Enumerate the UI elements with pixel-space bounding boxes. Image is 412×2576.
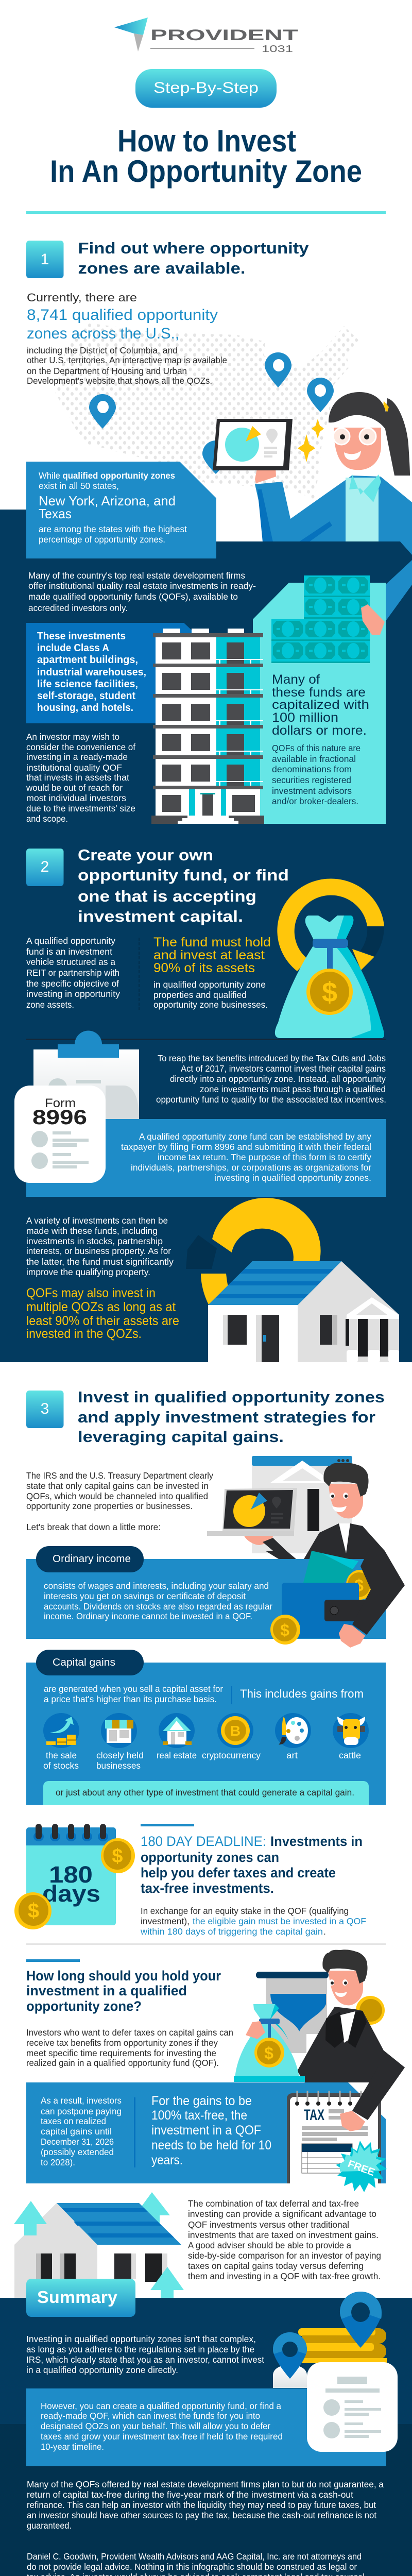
text: cash-out refinance: return of capital tax-free during the five-year mark of the investment via a cash-out [27, 2489, 353, 2500]
text: how long to hold: Investors who want to defer taxes on capital gains can [26, 2027, 233, 2038]
text: multiple QOZs: invested in the QOZs. [26, 1327, 142, 1341]
summary badge [26, 2279, 135, 2317]
text: convenience of QOF: and scope. [26, 814, 68, 824]
panel: tax free gains: As a result, investors [41, 2095, 122, 2106]
text: tax cuts and jobs act: directly into an opportunity zone. Instead, all opportunity [170, 1074, 386, 1084]
text: 90 percent rule: in qualified opportunity zone [153, 979, 266, 990]
icon: sparkles [298, 419, 324, 462]
panel: tax free gains [26, 2082, 386, 2183]
panel: tax free gains: capital gains until [41, 2126, 112, 2137]
text: what is a QOF: REIT or partnership with [26, 968, 119, 978]
step 2 heading: Create your own [78, 846, 213, 864]
panel: form 8996 description: taxpayer by filing Form 8996 and submitting it with their federal [121, 1142, 371, 1152]
panel: 100 million funds: and/or broker-dealers. [272, 796, 358, 806]
text: real estate firms: offer institutional quality real estate investments in ready- [28, 581, 256, 591]
text: convenience of QOF: investing in a ready-made [26, 752, 128, 762]
text: cash-out refinance: Many of the QOFs offered by real estate development firms plan to but do not guarantee, a [27, 2479, 384, 2489]
text: what is a QOF: zone assets. [26, 999, 74, 1010]
text: summary intro: as long as you adhere to the regulations set in place by the [26, 2344, 254, 2354]
text: variety of investments: the latter, the fund must significantly [26, 1257, 174, 1267]
text: 90 percent rule: 90% of its assets [153, 961, 255, 975]
text: combination of tax deferral: investing can provide a significant advantage to [188, 2209, 376, 2219]
panel: 100 million funds: Many of [272, 672, 320, 687]
panel: 100 million funds [253, 583, 386, 824]
text: what is a QOF [26, 936, 120, 1010]
icon: money bag with circular arrow [275, 878, 384, 1038]
panel: form 8996 description: investing in qualified opportunity zones. [214, 1173, 371, 1183]
panel: create a QOF: designated QOZs on your behalf. This will allow you to defer [41, 2421, 270, 2431]
title: In An Opportunity Zone [50, 154, 362, 189]
icon: form 8996 clipboard: 8996 [32, 1106, 87, 1129]
callout: other investments [43, 1781, 369, 1805]
panel: ordinary income: interests you get on savings or certificate of deposit [44, 1591, 246, 1601]
step 1 heading: Find out where opportunity [78, 239, 309, 257]
callout: states with most zones: percentage of opportunity zones. [39, 534, 165, 545]
text: combination of tax deferral: QOF investments versus other traditional [188, 2219, 349, 2230]
man with money bag: $ [264, 2044, 273, 2062]
panel: ordinary income [26, 1559, 386, 1639]
text: 180 day deadline: Investments in [270, 1834, 363, 1849]
text: disclaimer: do not provide legal advice. Nothing in this infographic should be construed as legal or [27, 2562, 357, 2572]
text: how long to hold: opportunity zone? [26, 1998, 142, 2014]
panel: tax free gains: 100% tax-free, the [151, 2108, 247, 2123]
text: real estate firms: made qualified opportunity funds (QOFs), available to [28, 591, 238, 602]
intro text: 8,741 qualified opportunity [27, 307, 218, 324]
text: how long to hold [26, 1959, 233, 2068]
icon: coin stack, pins and document [273, 2292, 398, 2452]
step-by-step pill: Step-By-Step [153, 79, 259, 96]
man with money bag [234, 1950, 405, 2082]
panel: 100 million funds: these funds are [272, 685, 366, 700]
icon: wallet with cash and coins [270, 1546, 405, 1648]
step 3 heading: 3 [41, 1400, 49, 1417]
panel: investments include: apartment buildings, [37, 654, 138, 666]
text: disclaimer: Daniel C. Goodwin, Provident Wealth Advisors and AAG Capital, Inc. are not attorneys and [27, 2551, 362, 2562]
navy background: sections 1 and 2 [0, 510, 412, 1362]
icon: money stacks [271, 575, 370, 663]
text: summary intro [26, 2334, 264, 2375]
panel: tax free gains: December 31, 2026 [41, 2137, 114, 2147]
panel: 100 million funds: investment advisors [272, 786, 352, 796]
text: combination of tax deferral: side-by-side comparison for an investor of paying [188, 2250, 381, 2261]
text: 90 percent rule: The fund must hold [153, 935, 271, 950]
panel: ordinary income: income. Ordinary income cannot be invested in a QOF. [44, 1611, 252, 1621]
intro text: including the District of Columbia, and [27, 345, 178, 355]
intro text: zones across the U.S., [27, 325, 179, 342]
icon labels: cryptocurrency [202, 1750, 261, 1760]
icon: house [163, 1717, 192, 1745]
text: what is a QOF: fund is an investment [26, 946, 112, 957]
panel: 100 million funds: denominations from [272, 764, 352, 774]
logo: PROVIDENT [150, 27, 298, 44]
panel: 100 million funds: securities registered [272, 775, 351, 785]
icon: tax document with FREE badge: FREE [346, 2158, 376, 2178]
text: 180 day deadline: investment), [141, 1916, 190, 1926]
step 2 heading: 2 [41, 858, 49, 875]
ordinary income pill [36, 1546, 144, 1572]
icon: 180 days calendar [14, 1824, 135, 1929]
panel: capital gains: are generated when you sell a capital asset for [44, 1684, 223, 1694]
text: convenience of QOF: that invests in assets that [26, 772, 129, 783]
panel: ordinary income: consists of wages and interests, including your salary and [44, 1581, 269, 1591]
callout: states with most zones: New York, Arizona, and [39, 493, 176, 509]
callout: states with most zones: Texas [39, 506, 72, 521]
icon: 180 days calendar: days [42, 1880, 100, 1907]
text: tax cuts and jobs act [156, 1053, 386, 1105]
callout: states with most zones: While qualified opportunity zones [39, 470, 175, 481]
text: cash-out refinance [27, 2479, 384, 2531]
panel: create a QOF: taxes and grow your investment tax-free if held to the required [41, 2431, 283, 2442]
icon: location pins [89, 352, 334, 474]
text: 180 day deadline: In exchange for an equity stake in the QOF (qualifying [141, 1906, 349, 1916]
step 3 heading: and apply investment strategies for [78, 1408, 375, 1426]
text: variety of investments: interests, or business property. As for [26, 1246, 171, 1256]
text: 90 percent rule: and invest at least [153, 948, 265, 962]
text: multiple QOZs: least 90% of their assets are [26, 1314, 179, 1328]
panel: tax free gains: years. [151, 2153, 183, 2167]
panel: create a QOF: 10-year timeline. [41, 2442, 104, 2452]
text: 180 day deadline: within 180 days of triggering the capital gain [140, 1926, 323, 1937]
text: tax cuts and jobs act: To reap the tax benefits introduced by the Tax Cuts and Jobs [158, 1053, 386, 1063]
text: convenience of QOF: would be out of reach for [26, 783, 123, 793]
panel: investments include: self-storage, student [37, 690, 135, 702]
text: IRS and treasury [26, 1470, 213, 1532]
icon: house with circular arrow [186, 1198, 399, 1363]
icon: apartment building [151, 629, 264, 824]
text: IRS and treasury: QOFs, which would be channeled into qualified [26, 1491, 208, 1501]
text: variety of investments [26, 1215, 174, 1277]
icon: form 8996 clipboard [14, 1031, 139, 1183]
text: variety of investments: made with these funds, including [26, 1226, 158, 1236]
text: how long to hold: meet specific time requirements for investing the [26, 2048, 216, 2058]
icon: stocks [46, 1717, 76, 1745]
text: convenience of QOF: consider the convenience of [26, 742, 135, 752]
text: how long to hold: realized gain in a qualified opportunity fund (QOF). [26, 2058, 219, 2068]
summary badge: Summary [37, 2287, 118, 2307]
text: IRS and treasury: opportunity zone properties or businesses. [26, 1501, 193, 1511]
title [50, 124, 362, 189]
text: multiple QOZs: multiple QOZs as long as at [26, 1300, 176, 1314]
icon: form 8996 clipboard: Form [45, 1096, 76, 1110]
capital gains pill [36, 1650, 144, 1675]
text: summary intro: IRS, which clearly state that you as an investor, cannot invest [26, 2354, 264, 2365]
icon: money bag with circular arrow: $ [322, 977, 337, 1008]
navy background: summary [0, 2298, 412, 2424]
panel: create a QOF [26, 2388, 386, 2466]
text: 180 day deadline: the eligible gain must be invested in a QOF [193, 1916, 366, 1926]
text: 180 day deadline: tax-free investments. [141, 1880, 274, 1896]
text: combination of tax deferral: taxes on capital gains today versus deferring [188, 2261, 364, 2271]
step 3 heading: Invest in qualified opportunity zones [78, 1388, 385, 1406]
text: convenience of QOF: institutional quality QOF [26, 762, 122, 773]
panel: investments include [26, 623, 192, 723]
text: 180 day deadline: . [323, 1926, 326, 1937]
text: tax cuts and jobs act: zone investments must pass through a qualified [200, 1084, 386, 1094]
step 1 heading: zones are available. [78, 259, 245, 277]
text: combination of tax deferral: The combination of tax deferral and tax-free [188, 2198, 359, 2209]
text: IRS and treasury: state that only capital gains can be invested in [26, 1481, 209, 1491]
step-by-step pill [135, 69, 277, 108]
text: cash-out refinance: guaranteed. [27, 2520, 72, 2531]
icon labels: art [286, 1750, 298, 1760]
panel: form 8996 description: income tax return. The purpose of this form is to certify [158, 1152, 371, 1162]
woman with tablet [213, 392, 412, 542]
text: combination of tax deferral [188, 2198, 381, 2281]
text: variety of investments: investments in stocks, partnership [26, 1236, 163, 1246]
text: combination of tax deferral: A good adviser should be able to provide a [188, 2240, 351, 2250]
icon labels: businesses [96, 1760, 141, 1771]
panel: tax free gains: needs to be held for 10 [151, 2138, 271, 2153]
text: 180 day deadline: opportunity zones can [141, 1850, 279, 1865]
text: what is a QOF: A qualified opportunity [26, 936, 115, 946]
icon labels: of stocks [43, 1760, 79, 1771]
step 2 heading: one that is accepting [78, 887, 256, 905]
panel: investments include: life science facilities, [37, 678, 138, 690]
text: variety of investments: A variety of investments can then be [26, 1215, 168, 1226]
panel: investments include: housing, and hotels. [37, 702, 133, 714]
intro text [27, 291, 227, 386]
text: real estate firms: accredited investors only. [28, 603, 128, 613]
text: how long to hold: How long should you hold your [26, 1968, 221, 1984]
panel: 100 million funds: 100 million [272, 710, 338, 725]
woman's sleeve and hand [368, 541, 412, 622]
icon: shop [105, 1720, 133, 1743]
text: combination of tax deferral: investments that are taxed on investment gains. [188, 2230, 379, 2240]
text: what is a QOF: investing in opportunity [26, 989, 120, 999]
text: 180 day deadline: help you defer taxes and create [141, 1865, 336, 1880]
man with laptop [207, 1456, 385, 1559]
panel: form 8996 description: individuals, partnerships, or corporations as organizations for [131, 1162, 371, 1173]
step 2 heading: opportunity fund, or find [78, 866, 289, 884]
icon labels: real estate [157, 1750, 197, 1760]
panel: tax free gains: (possibly extended [41, 2147, 114, 2157]
text: how long to hold: investment in a qualified [26, 1983, 187, 1998]
step 1 heading: 1 [41, 251, 49, 268]
panel: tax free gains: taxes on realized [41, 2116, 106, 2126]
intro text: Currently, there are [27, 291, 137, 304]
text: IRS and treasury: Let's break that down a little more: [26, 1522, 161, 1532]
callout: states with most zones: exist in all 50 states, [39, 481, 119, 491]
icon: house with arrows [14, 2192, 184, 2298]
logo: 1031 [262, 44, 293, 54]
text: convenience of QOF: due to the investments' size [26, 803, 135, 814]
icon labels: the sale [46, 1750, 77, 1760]
text: cash-out refinance: an investor should have other sources to pay the tax, because the cash-out refinance is not [27, 2510, 376, 2520]
text: what is a QOF: the specific objective of [26, 978, 119, 989]
logo [114, 18, 298, 54]
icon labels: cattle [339, 1750, 361, 1760]
intro text: on the Department of Housing and Urban [27, 366, 187, 376]
panel: capital gains: a price that's higher than its purchase basis. [44, 1694, 217, 1704]
panel: capital gains [26, 1663, 386, 1805]
text: disclaimer [26, 2551, 365, 2576]
text: 90 percent rule: properties and qualified [153, 990, 247, 1000]
icon labels [43, 1750, 361, 1771]
dotted US map [54, 323, 358, 500]
icon: wallet with cash and coins: $ [280, 1621, 289, 1639]
icon: wallet with cash and coins: $ [354, 1576, 364, 1595]
text: how long to hold: receive tax benefits from opportunity zones if they [26, 2038, 218, 2048]
step 2 heading: investment capital. [78, 907, 243, 925]
hand over money [361, 604, 385, 635]
icon: bitcoin coin [221, 1716, 250, 1745]
panel: investments include: industrial warehouses, [37, 666, 146, 678]
panel: 100 million funds: dollars or more. [272, 723, 367, 738]
ordinary income pill: Ordinary income [53, 1553, 131, 1565]
panel: create a QOF: ready-made QOF, which can invest the funds for you into [41, 2411, 260, 2421]
text: real estate firms: Many of the country's top real estate development firms [28, 570, 245, 581]
text: multiple QOZs [26, 1286, 179, 1341]
panel: tax free gains: For the gains to be [151, 2094, 252, 2108]
step 1 heading [26, 239, 309, 278]
icon labels: closely held [96, 1750, 144, 1760]
panel: tax free gains: to 2028). [41, 2157, 75, 2167]
text: cash-out refinance: refinance. This can help an investor with the liquidity they may need to pay future taxes, but [27, 2500, 376, 2510]
panel: capital gains: This includes gains from [240, 1687, 364, 1700]
title: How to Invest [117, 124, 296, 158]
text: tax cuts and jobs act: opportunity fund to qualify for the associated tax incentives. [156, 1094, 386, 1105]
icon: cattle [337, 1717, 365, 1745]
capital gains pill: Capital gains [53, 1657, 115, 1668]
panel: 100 million funds: available in fractional [272, 754, 356, 764]
icon: tax document with FREE badge [287, 2050, 405, 2192]
intro text: Development's website that shows all the QOZs. [27, 376, 212, 386]
text: 90 percent rule: opportunity zone businesses. [153, 999, 268, 1010]
panel: create a QOF: However, you can create a qualified opportunity fund, or find a [41, 2401, 281, 2411]
text: 180 day deadline: 180 DAY DEADLINE: [141, 1834, 266, 1849]
text: summary intro: Investing in qualified opportunity zones isn't that complex, [26, 2334, 256, 2344]
text: what is a QOF: vehicle structured as a [26, 957, 115, 967]
text: 90 percent rule [153, 935, 271, 1010]
step 3 heading [26, 1388, 385, 1446]
text: IRS and treasury: The IRS and the U.S. Treasury Department clearly [26, 1470, 213, 1481]
panel: 100 million funds: capitalized with [272, 698, 369, 712]
text: convenience of QOF: most individual investors [26, 793, 126, 803]
panel: ordinary income: accounts. Dividends on stocks are also regarded as regular [44, 1601, 272, 1612]
panel: 100 million funds: QOFs of this nature are [272, 743, 360, 753]
text: summary intro: in a qualified opportunity zone directly. [26, 2365, 178, 2375]
icon: 180 days calendar: $ [112, 1845, 123, 1867]
icon: bitcoin coin: B [230, 1723, 241, 1739]
text: real estate firms [28, 570, 256, 613]
step 2 heading [26, 846, 289, 925]
icon: palette [279, 1717, 308, 1744]
panel: form 8996 description [26, 1119, 386, 1197]
callout: states with most zones: are among the states with the highest [39, 524, 187, 534]
text: multiple QOZs: QOFs may also invest in [26, 1286, 156, 1300]
intro text: other U.S. territories. An interactive map is available [27, 355, 227, 365]
text: variety of investments: improve the qualifying property. [26, 1267, 150, 1277]
panel: tax free gains: can postpone paying [41, 2106, 122, 2116]
step 3 heading: leveraging capital gains. [78, 1428, 284, 1446]
icon: tax document with FREE badge: TAX [304, 2107, 324, 2124]
text: tax cuts and jobs act: Act of 2017, investors cannot invest their capital gains [181, 1063, 386, 1074]
text: 180 day deadline [140, 1824, 366, 1937]
icon: 180 days calendar: 180 [49, 1861, 93, 1888]
callout: other investments: or just about any other type of investment that could generate a capital gain. [56, 1787, 354, 1798]
panel: form 8996 description: A qualified opportunity zone fund can be established by any [139, 1131, 371, 1142]
panel: investments include: include Class A [37, 642, 109, 654]
text: convenience of QOF: An investor may wish to [26, 732, 119, 742]
panel: tax free gains: investment in a QOF [151, 2123, 261, 2138]
icon: 180 days calendar: $ [28, 1900, 39, 1922]
panel: investments include: These investments [37, 630, 126, 642]
callout: states with most zones [26, 462, 216, 558]
text: combination of tax deferral: them and investing in a QOF with tax-free growth. [188, 2271, 381, 2281]
text: convenience of QOF [26, 732, 135, 824]
